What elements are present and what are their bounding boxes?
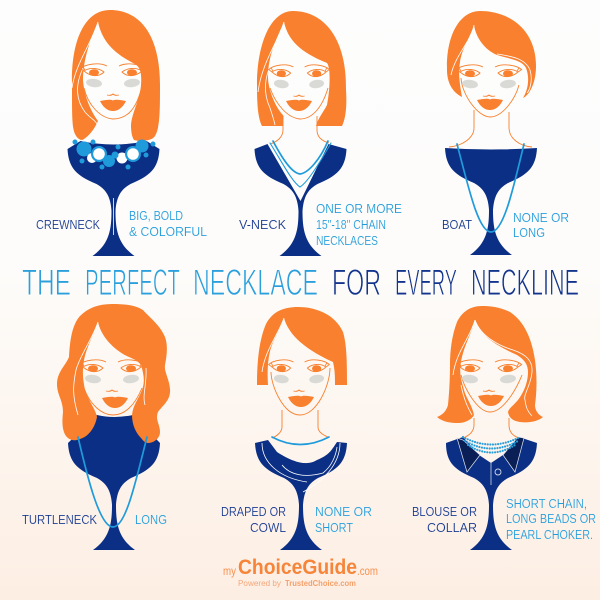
figure: draped or cowl — [221, 307, 372, 550]
face — [79, 360, 145, 415]
hair: wavy — [57, 304, 170, 443]
hair: short — [447, 11, 536, 98]
hair: blunt bob — [257, 307, 347, 385]
dress: boat glass — [445, 148, 537, 255]
necklace: pearl choker — [463, 437, 520, 452]
advice: none or long: LONG — [513, 226, 545, 240]
advice: big, bold and colorful — [129, 209, 207, 239]
title: NECKLACE — [193, 262, 318, 303]
label: draped or cowl: DRAPED OR — [221, 505, 286, 519]
logo: myChoiceGuide: Powered by — [238, 578, 282, 588]
advice: short chain, long beads or pearl choker — [506, 497, 596, 542]
dress: v-neck glass — [254, 144, 346, 256]
title: THE — [22, 262, 71, 303]
title: EVERY — [395, 262, 457, 303]
logo: myChoiceGuide: .com — [357, 566, 378, 578]
title: PERFECT — [85, 262, 180, 303]
collar — [457, 437, 524, 485]
neck lines — [272, 410, 328, 438]
title: FOR — [332, 262, 381, 303]
face — [456, 360, 522, 412]
advice: chain necklaces — [316, 202, 402, 248]
hair: flipped — [437, 306, 543, 423]
advice: chain necklaces: 15"-18" CHAIN — [316, 218, 386, 232]
label: v-neck: V-NECK — [239, 218, 287, 232]
figure: boat — [442, 11, 569, 255]
necklace: long — [78, 437, 147, 527]
logo: myChoiceGuide: my — [223, 566, 236, 578]
dress: crewneck glass — [68, 141, 160, 256]
advice: none or short: SHORT — [315, 521, 353, 535]
neck lines — [449, 110, 532, 147]
figure: v-neck — [239, 11, 402, 256]
label: draped or cowl — [221, 505, 286, 535]
neck lines — [270, 116, 329, 144]
advice: short chain, long beads or pearl choker: SHORT CHAIN, — [506, 497, 587, 511]
dress: blouse glass — [446, 437, 537, 550]
advice: chain necklaces: ONE OR MORE — [316, 202, 402, 216]
necklaces: two chains — [270, 141, 331, 187]
label: blouse or collar — [412, 505, 477, 535]
hair: bob — [257, 11, 346, 126]
label: turtleneck: TURTLENECK — [22, 513, 98, 527]
figure: turtleneck — [22, 304, 170, 550]
face — [456, 65, 522, 117]
neck lines — [463, 418, 519, 438]
advice: big, bold and colorful: & COLORFUL — [129, 225, 207, 239]
necklace: long — [457, 144, 524, 232]
label: blouse or collar: BLOUSE OR — [412, 505, 477, 519]
dress: turtleneck glass — [68, 415, 160, 550]
cowl drape lines — [262, 443, 340, 492]
logo: myChoiceGuide: TrustedChoice.com — [285, 578, 356, 588]
face — [80, 64, 146, 119]
label: draped or cowl: COWL — [250, 521, 286, 535]
logo: myChoiceGuide — [223, 556, 378, 588]
advice: none or short — [315, 505, 372, 535]
figure: blouse or collar — [412, 306, 596, 550]
label: boat: BOAT — [442, 218, 472, 232]
dress: cowl glass — [255, 440, 347, 550]
advice: none or short: NONE OR — [315, 505, 372, 519]
label: crewneck: CREWNECK — [36, 218, 101, 232]
hair: long straight — [72, 10, 160, 141]
advice: chain necklaces: NECKLACES — [316, 234, 378, 248]
face — [268, 360, 330, 415]
label: blouse or collar: COLLAR — [427, 521, 477, 535]
title — [22, 262, 579, 303]
necklace: big bold beads — [72, 140, 156, 170]
advice: long: LONG — [135, 513, 167, 527]
figure: crewneck — [36, 10, 207, 256]
advice: big, bold and colorful: BIG, BOLD — [129, 209, 183, 223]
face — [268, 65, 330, 119]
advice: none or long — [513, 211, 569, 240]
necklace: short — [272, 437, 329, 444]
advice: none or long: NONE OR — [513, 211, 569, 225]
logo: myChoiceGuide: ChoiceGuide — [238, 556, 357, 579]
